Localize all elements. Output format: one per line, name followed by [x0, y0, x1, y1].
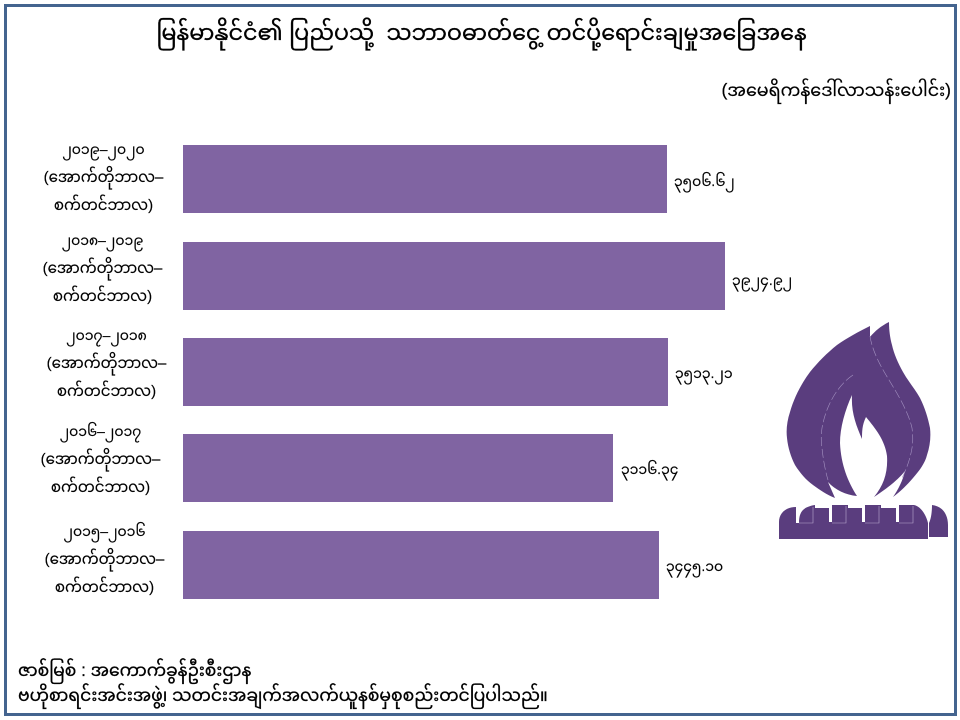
row label 2016-2017: (အောက်တိုဘာလ– — [41, 451, 160, 468]
value 2019-2020: ၃၅၀၆.၆၂ — [674, 173, 735, 189]
row label 2017-2018: ၂၀၁၇–၂၀၁၈ — [66, 327, 147, 343]
row label 2019-2020: စက်တင်ဘာလ) — [54, 197, 153, 214]
bar chart — [41, 141, 792, 599]
value 2015-2016: ၃၄၄၅.၁၀ — [666, 558, 723, 574]
value 2018-2019: ၃၉၂၄.၉၂ — [732, 272, 792, 288]
row label 2018-2019: (အောက်တိုဘာလ– — [43, 260, 162, 277]
row label 2017-2018: (အောက်တိုဘာလ– — [47, 355, 166, 372]
row label 2019-2020: (အောက်တိုဘာလ– — [44, 169, 163, 186]
row label 2017-2018 — [47, 327, 166, 400]
row label 2016-2017: စက်တင်ဘာလ) — [51, 479, 150, 496]
row label 2018-2019: ၂၀၁၈–၂၀၁၉ — [62, 232, 143, 248]
source note: ဇာစ်မြစ် : အကောက်ခွန်ဦးစီးဌာန — [18, 660, 251, 680]
title: မြန်မာနိုင်ငံ၏ ပြည်ပသို့ သဘာဝဓာတ်ငွေ့ တင်ပို့ရောင်းချမှုအခြေအနေ — [156, 20, 807, 45]
burner — [779, 505, 948, 539]
flame — [787, 322, 930, 498]
source note: ဗဟိုစာရင်းအင်းအဖွဲ့၊ သတင်းအချက်အလက်ယူနစ်မှစုစည်းတင်ပြပါသည်။ — [18, 685, 548, 705]
bar 2016-2017 — [183, 434, 613, 502]
row label 2016-2017 — [41, 422, 160, 496]
source note — [18, 658, 548, 710]
value 2016-2017: ၃၁၁၆.၃၄ — [621, 461, 678, 477]
row label 2017-2018: စက်တင်ဘာလ) — [57, 383, 156, 400]
bar 2018-2019 — [183, 242, 725, 310]
row label 2015-2016: ၂၀၁၅–၂၀၁၆ — [64, 523, 145, 539]
row label 2019-2020: ၂၀၁၉–၂၀၂၀ — [62, 141, 145, 157]
row label 2015-2016 — [45, 522, 164, 596]
bar 2017-2018 — [183, 338, 668, 406]
unit note: (အမေရိကန်ဒေါ်လာသန်းပေါင်း) — [721, 80, 951, 100]
row label 2019-2020 — [44, 141, 164, 214]
bar 2019-2020 — [183, 145, 667, 213]
value 2017-2018: ၃၅၁၃.၂၁ — [675, 365, 733, 381]
row label 2016-2017: ၂၀၁၆–၂၀၁၇ — [60, 423, 141, 439]
row label 2015-2016: (အောက်တိုဘာလ– — [45, 551, 164, 568]
bar 2015-2016 — [183, 531, 659, 599]
row label 2018-2019 — [43, 232, 162, 305]
icon: gas flame on burner — [779, 322, 948, 539]
row label 2018-2019: စက်တင်ဘာလ) — [53, 288, 152, 305]
row label 2015-2016: စက်တင်ဘာလ) — [55, 579, 154, 596]
